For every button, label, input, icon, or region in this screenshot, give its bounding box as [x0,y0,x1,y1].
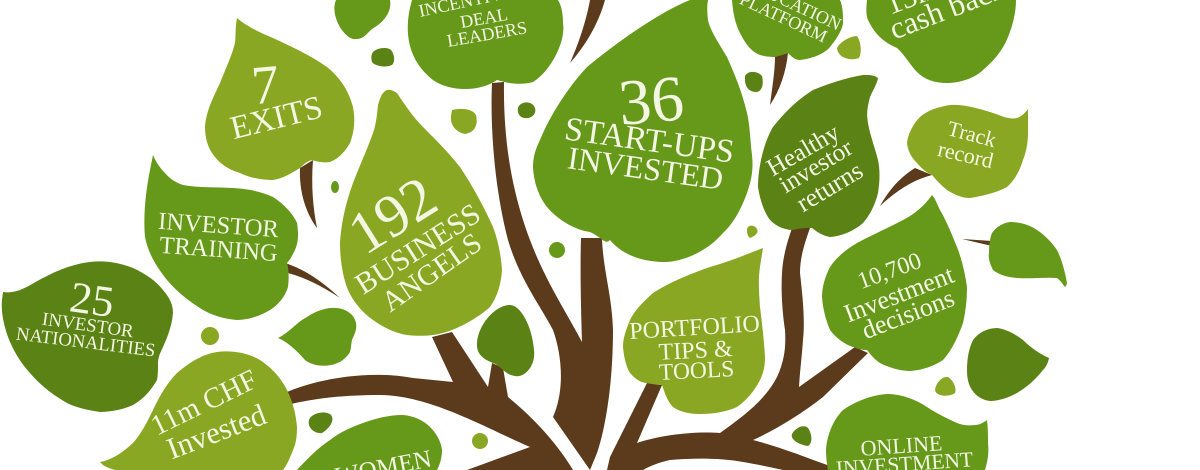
leaf: education platform [732,0,844,60]
leaf: 36 start-ups invested [533,0,753,262]
leaf: track record [907,105,1028,198]
leaf: portfolio tips and tools: TIPS & [658,336,734,366]
leaf: 192 business angels [337,90,502,336]
leaf: track record: record [936,136,996,173]
leaf: 25 investor nationalities: INVESTOR [41,309,135,342]
leaf: 11m CHF invested [100,351,297,470]
leaf: 7 exits [205,18,354,180]
leaf: 10,700 investment decisions: Investment [840,260,959,328]
leaf stems [285,0,992,298]
leaf: 10,700 investment decisions: decisions [858,283,958,345]
leaf: incentive deal leaders: DEAL [459,4,509,32]
tree trunk and main branches [287,82,868,470]
leaf: women [297,415,442,470]
leaf: 192 business angels: ANGELS [376,227,488,319]
leaf: 192 business angels: 192 [337,163,448,267]
leaf: investor training: TRAINING [159,232,279,267]
leaf: 25 investor nationalities [2,261,173,412]
leaf: 10,700 investment decisions: 10,700 [854,248,925,295]
decorative leaf dots [201,36,956,449]
leaf: small mid green [278,308,356,366]
leaf: 192 business angels: BUSINESS [349,197,487,301]
leaf: portfolio tips and tools: TOOLS [658,356,735,386]
leaf: 10,700 investment decisions [822,195,967,371]
leaf: small right mid green [989,222,1067,287]
leaf: 25 investor nationalities: 25 [67,272,117,327]
leaf: incentive deal leaders [408,0,563,89]
leaf: 7 exits: EXITS [227,90,326,147]
leaf: portfolio tips and tools: PORTFOLIO [629,311,761,345]
leaf: healthy investor returns: Healthy [762,119,845,182]
leaf: 11m CHF invested: 11m CHF [146,364,262,442]
leaf: track record: Track [945,116,999,152]
leaf: 36 start-ups invested: INVESTED [566,139,725,197]
leaf: healthy investor returns: returns [791,156,868,218]
leaf: portfolio tips and tools [623,248,765,414]
leaf: healthy investor returns [758,75,880,237]
leaf: investor training [144,155,298,320]
leaf: healthy investor returns: investor [775,134,858,199]
leaf: online investment: ONLINE [860,430,943,461]
leaf: incentive deal leaders: LEADERS [445,17,529,51]
leaf: 25 investor nationalities: NATIONALITIES [15,324,156,362]
leaf: dark right [967,328,1049,401]
leaf: 36 start-ups invested: 36 [616,62,687,140]
leaf: cash back [866,0,1016,83]
leaf: 7 exits: 7 [249,53,282,116]
leaf: 36 start-ups invested: START-UPS [562,110,737,171]
leaf: small dark on branch [477,305,534,376]
leaf: top small [334,0,390,39]
leaf: online investment [826,394,988,470]
leaf: 11m CHF invested: Invested [162,397,271,466]
leaf: investor training: INVESTOR [157,208,280,243]
